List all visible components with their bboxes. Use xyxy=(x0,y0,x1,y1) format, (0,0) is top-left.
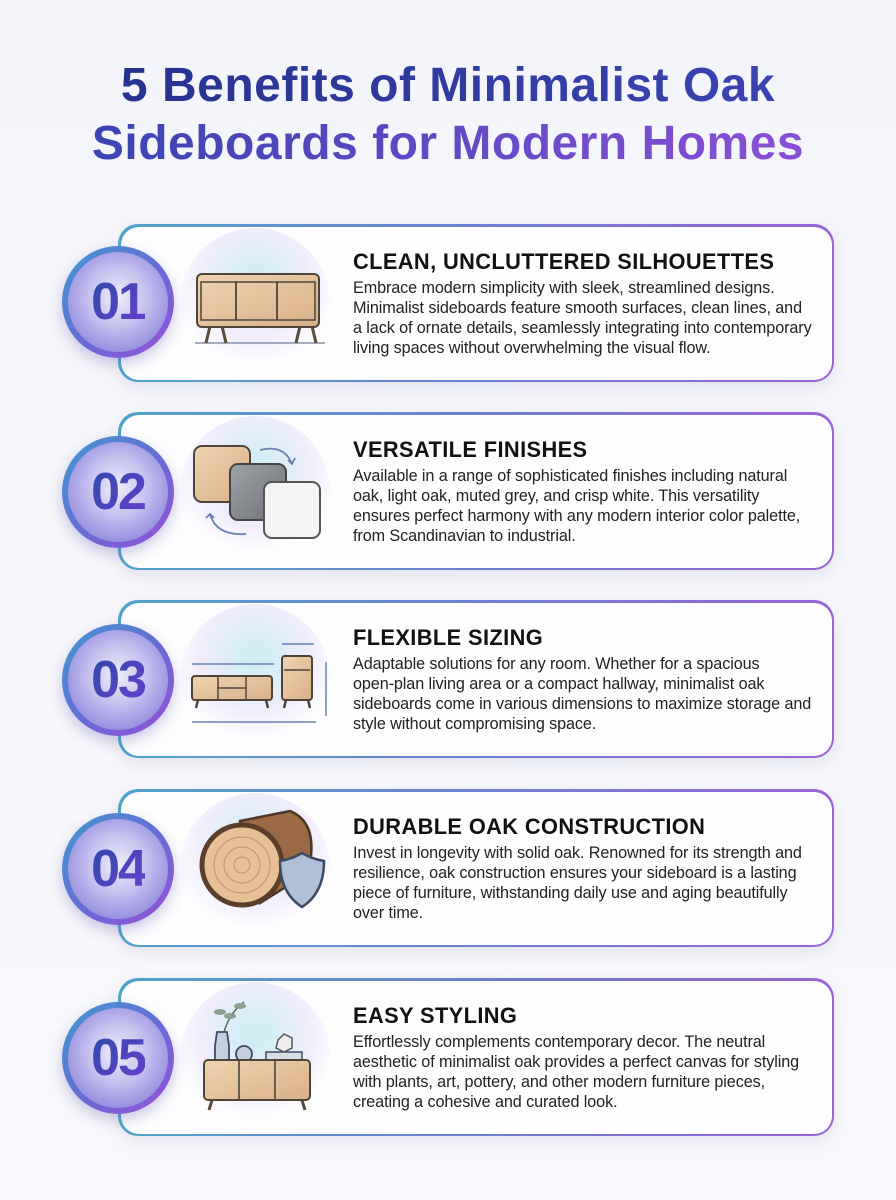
text: benefit 3: sideboards come in various dimensions to maximize storage and xyxy=(353,695,811,713)
text: benefit 2 xyxy=(353,437,800,545)
text: benefit 1: Embrace modern simplicity with sleek, streamlined designs. xyxy=(353,279,775,297)
text: benefit 3 xyxy=(353,625,811,733)
text: benefit 4 xyxy=(353,814,802,922)
text: benefit 3: style without compromising space. xyxy=(353,715,596,733)
text: benefit 1: Minimalist sideboards feature smooth surfaces, clean lines, and xyxy=(353,299,802,317)
number badge 05: 05 xyxy=(91,1029,145,1087)
number badge 02: 02 xyxy=(91,463,145,521)
panel: card 4 xyxy=(118,789,834,947)
text: benefit 4: Invest in longevity with solid oak. Renowned for its strength and xyxy=(353,844,802,862)
text: benefit 2: Available in a range of sophisticated finishes including natural xyxy=(353,467,787,485)
text: benefit 2: from Scandinavian to industrial. xyxy=(353,527,576,545)
text: benefit 3: Adaptable solutions for any room. Whether for a spacious xyxy=(353,655,760,673)
text: benefit 4: DURABLE OAK CONSTRUCTION xyxy=(353,814,705,839)
number badge 01 xyxy=(62,246,174,358)
title: 5 Benefits of Minimalist Oak xyxy=(121,59,775,112)
icon: sideboard xyxy=(185,228,325,350)
number badge 05 xyxy=(62,1002,174,1114)
panel: card 5 xyxy=(118,978,834,1136)
text: benefit 5 xyxy=(353,1003,799,1111)
title: Sideboards for Modern Homes xyxy=(92,117,804,170)
text: benefit 4: resilience, oak construction ensures your sideboard is a lasting xyxy=(353,864,796,882)
number badge 04: 04 xyxy=(91,840,145,898)
number badge 01: 01 xyxy=(91,273,145,331)
text: benefit 5: with plants, art, pottery, and other modern furniture pieces, xyxy=(353,1073,765,1091)
number badge 02 xyxy=(62,436,174,548)
text: benefit 1: living spaces without overwhelming the visual flow. xyxy=(353,339,710,357)
text: benefit 2: VERSATILE FINISHES xyxy=(353,437,587,462)
number badge 03: 03 xyxy=(91,651,145,709)
panel: card 1 xyxy=(118,224,834,382)
text: benefit 4: over time. xyxy=(353,904,423,922)
icon: oak log with shield xyxy=(185,793,326,916)
icon: styled sideboard xyxy=(185,982,324,1110)
text: benefit 3: open-plan living area or a compact hallway, minimalist oak xyxy=(353,675,764,693)
icon: finish swatches xyxy=(185,416,324,539)
icon: sizing xyxy=(185,604,327,726)
number badge 04 xyxy=(62,813,174,925)
text: benefit 5: EASY STYLING xyxy=(353,1003,517,1028)
text: benefit 5: Effortlessly complements contemporary decor. The neutral xyxy=(353,1033,765,1051)
panel: card 2 xyxy=(118,412,834,570)
number badge 03 xyxy=(62,624,174,736)
panel: card 3 xyxy=(118,600,834,758)
title xyxy=(92,59,804,170)
text: benefit 5: aesthetic of minimalist oak provides a perfect canvas for styling xyxy=(353,1053,799,1071)
text: benefit 2: oak, light oak, muted grey, and crisp white. This versatility xyxy=(353,487,759,505)
text: benefit 1 xyxy=(353,249,812,357)
text: benefit 3: FLEXIBLE SIZING xyxy=(353,625,543,650)
text: benefit 5: creating a cohesive and curated look. xyxy=(353,1093,617,1111)
text: benefit 4: piece of furniture, withstanding daily use and aging beautifully xyxy=(353,884,788,902)
text: benefit 2: ensures perfect harmony with any modern interior color palette, xyxy=(353,507,800,525)
text: benefit 1: CLEAN, UNCLUTTERED SILHOUETTES xyxy=(353,249,774,274)
text: benefit 1: a lack of ornate details, seamlessly integrating into contemporary xyxy=(353,319,812,337)
